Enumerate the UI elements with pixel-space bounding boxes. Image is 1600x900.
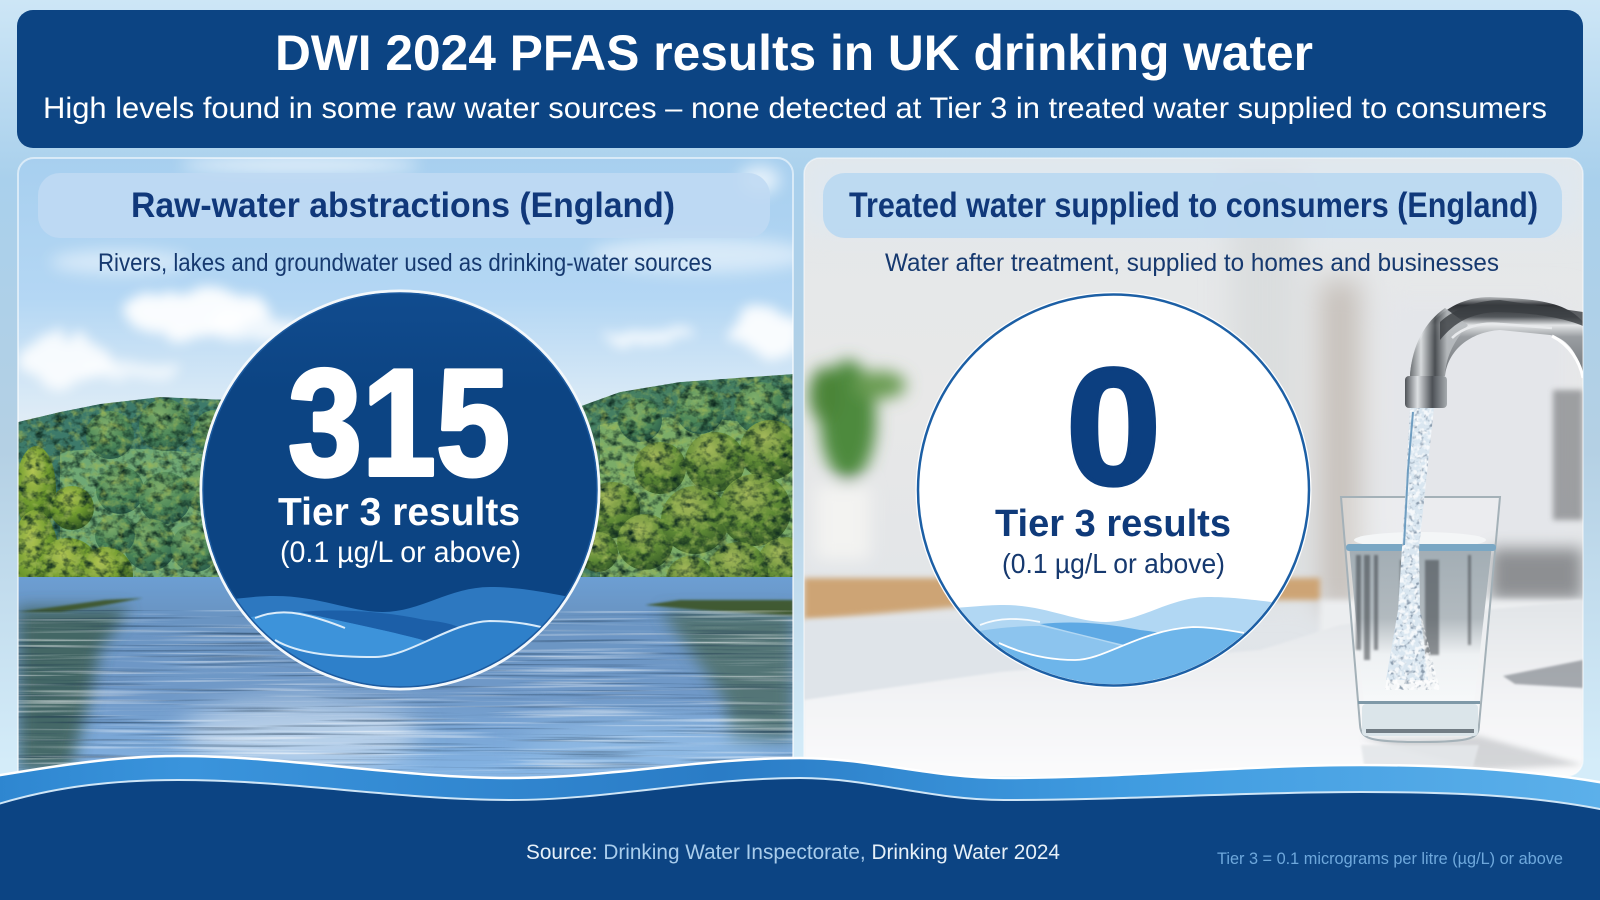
panel: raw-water abstractions	[11, 156, 813, 790]
glass of water	[1341, 408, 1500, 742]
panel description: Rivers, lakes and groundwater used as drinking-water sources	[98, 249, 712, 277]
footer block	[0, 778, 1600, 900]
stat circle: 315	[190, 291, 610, 700]
title: DWI 2024 PFAS results in UK drinking water	[275, 25, 1313, 81]
wave band	[0, 756, 1600, 900]
wood counter	[804, 578, 1320, 620]
panel heading pill: Raw-water abstractions (England)	[131, 186, 675, 225]
big number: 0	[1066, 335, 1161, 520]
tap	[1405, 297, 1583, 408]
photo: lake landscape	[11, 156, 813, 790]
stat circle: 0	[900, 292, 1320, 700]
wave decoration	[959, 597, 1272, 684]
panel heading pill	[38, 173, 770, 238]
panel description: Water after treatment, supplied to homes and businesses	[885, 249, 1499, 277]
stat threshold: (0.1 µg/L or above)	[1002, 548, 1225, 579]
wave decoration	[236, 587, 565, 686]
footnote: Tier 3 = 0.1 micrograms per litre (µg/L) or above	[1217, 849, 1563, 868]
subtitle: High levels found in some raw water sources – none detected at Tier 3 in treated water supplied to consumers	[43, 92, 1547, 125]
photo: kitchen tap and glass	[804, 158, 1583, 780]
panel border	[18, 158, 793, 788]
shadow under glass	[1361, 736, 1583, 770]
stat label: Tier 3 results	[278, 491, 520, 534]
header banner	[17, 10, 1583, 148]
panel heading pill	[823, 173, 1562, 238]
water stream	[1386, 408, 1434, 680]
marble counter	[804, 600, 1583, 780]
stat label: Tier 3 results	[995, 503, 1231, 545]
source line: Source: Drinking Water Inspectorate, Drinking Water 2024	[526, 841, 1060, 864]
big number: 315	[288, 338, 510, 508]
panel: treated water	[804, 158, 1583, 780]
stat threshold: (0.1 µg/L or above)	[280, 536, 521, 569]
plant	[809, 360, 906, 560]
panel border	[804, 158, 1583, 776]
